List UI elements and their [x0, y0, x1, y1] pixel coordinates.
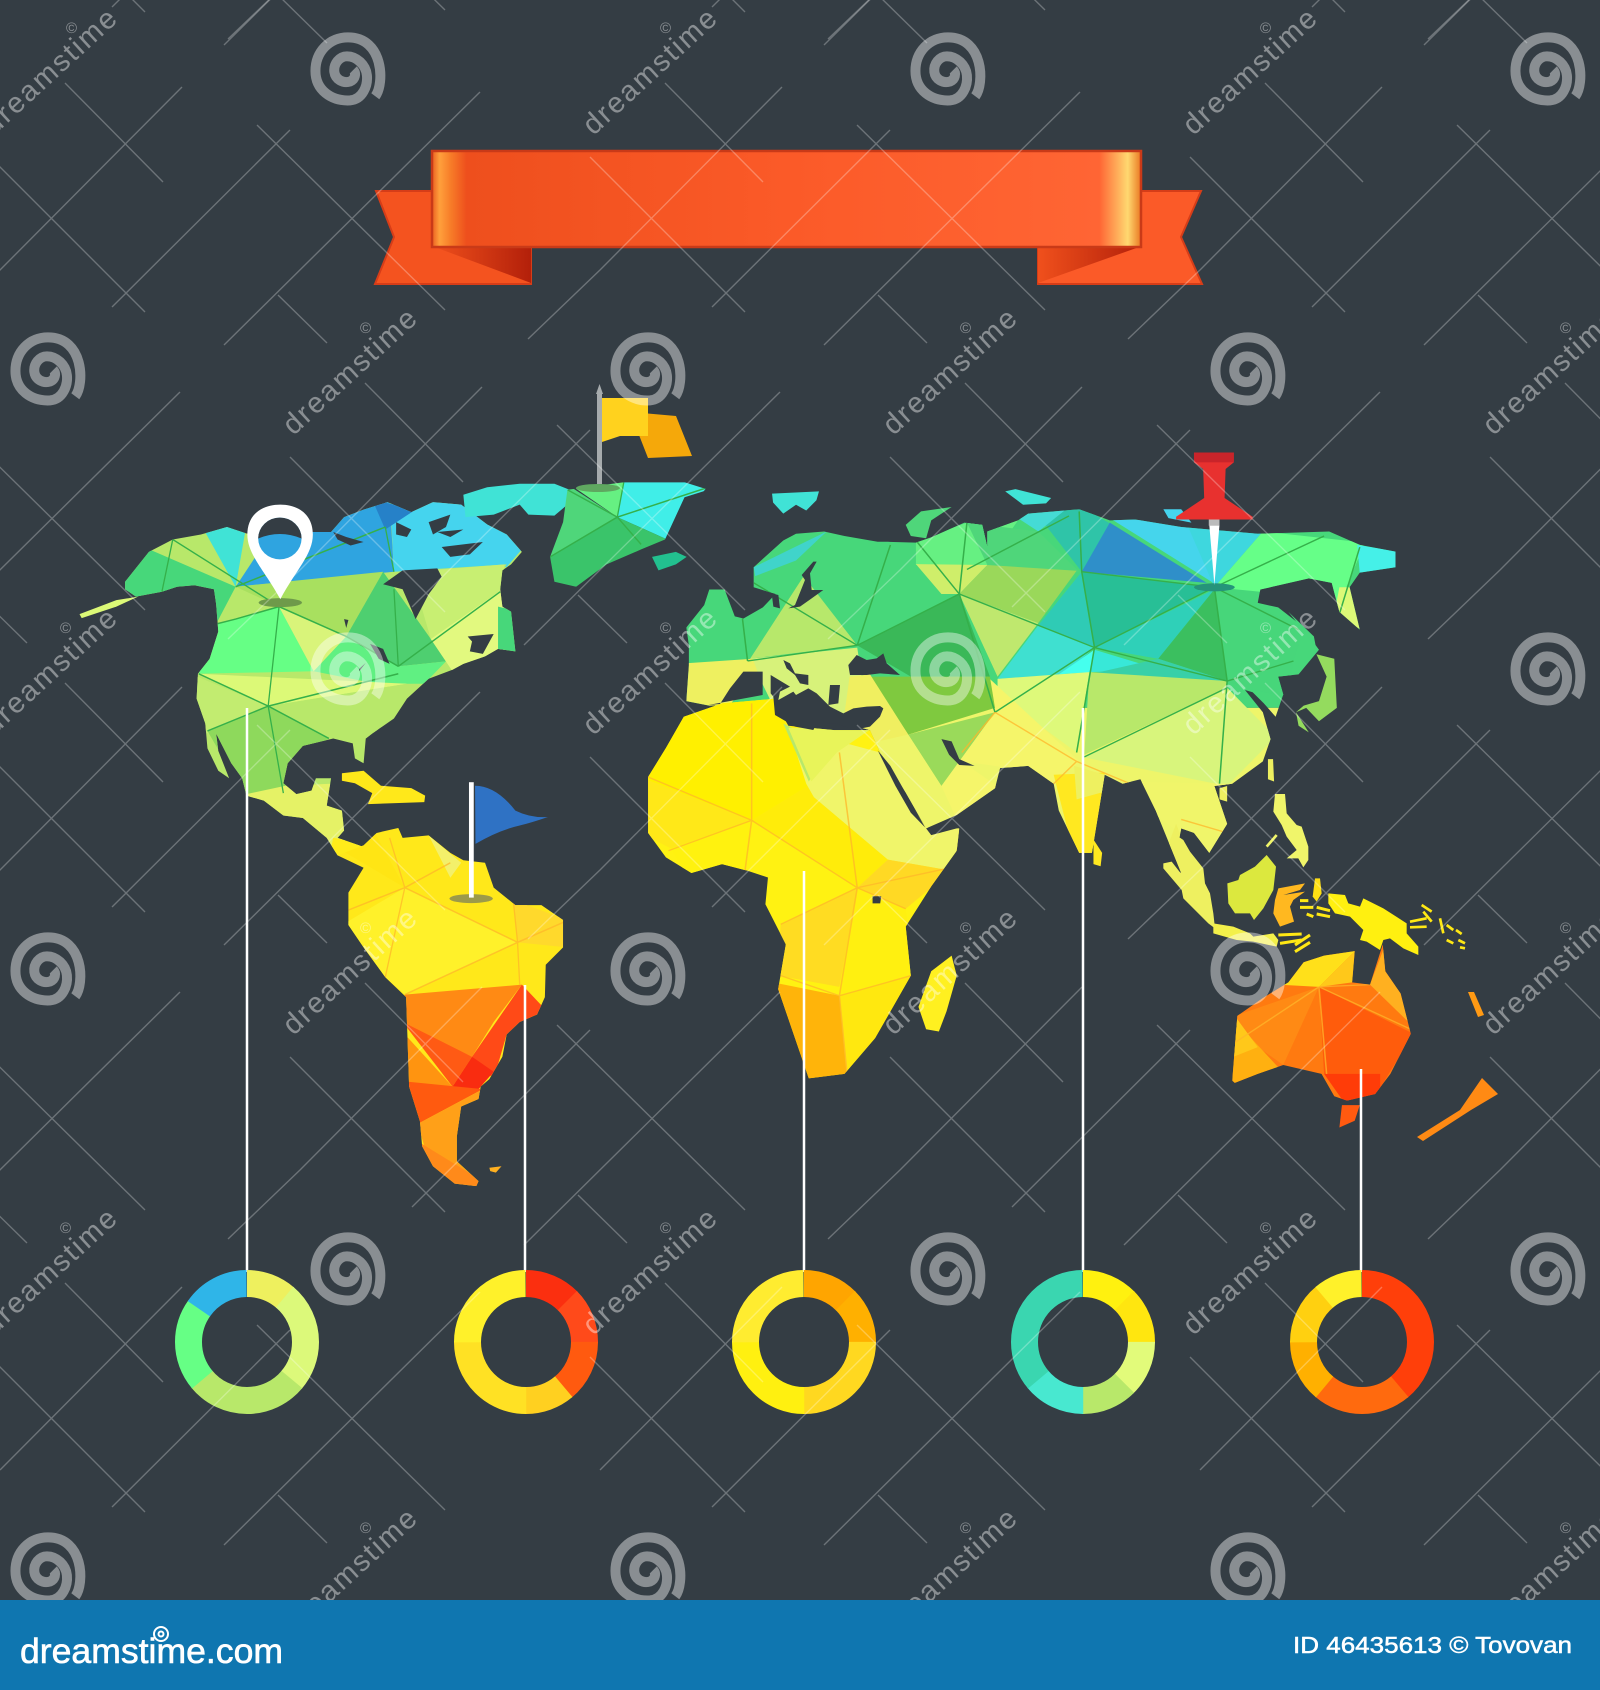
north america	[125, 502, 522, 856]
gulf of aden	[926, 822, 959, 835]
watermark text: ©	[360, 320, 371, 337]
south america	[338, 828, 564, 1186]
iceland	[652, 552, 687, 570]
greenland	[546, 480, 711, 589]
watermark text: dreamstime	[577, 603, 723, 741]
ribbon left tail	[375, 191, 531, 284]
watermark text: dreamstime	[577, 3, 723, 141]
watermark text: ©	[60, 620, 71, 637]
leader line 2	[524, 985, 526, 1272]
mediterranean, black sea and baltic coastlines	[708, 562, 900, 730]
world map: Eurasia, Africa, Australia	[640, 489, 1421, 1127]
leader line 1	[246, 708, 248, 1272]
watermark text: dreamstime	[277, 303, 423, 441]
watermark text: dreamstime	[877, 903, 1023, 1041]
footer logo text: dreamstime.com	[20, 1632, 283, 1671]
watermark text: dreamstime	[277, 903, 423, 1041]
malay peninsula and sumatra	[1163, 837, 1215, 928]
southeast asia islands	[1163, 794, 1465, 955]
watermark text: ©	[1260, 20, 1271, 37]
watermark text: ©	[660, 20, 671, 37]
ribbon right fold	[1038, 246, 1142, 283]
tasmania	[1339, 1105, 1360, 1127]
aleutian islands	[80, 597, 138, 618]
watermark text: dreamstime	[1177, 1203, 1323, 1341]
footer logo spiral	[154, 1627, 168, 1641]
watermark text: dreamstime	[1177, 603, 1323, 741]
aegean sea	[828, 685, 840, 705]
black sea	[848, 653, 900, 675]
new caledonia	[1468, 992, 1484, 1017]
kattegat	[772, 593, 780, 608]
sakhalin	[1288, 612, 1316, 650]
watermark text: ©	[960, 920, 971, 937]
watermark text: ©	[660, 1220, 671, 1237]
donut chart 1	[188, 1284, 306, 1400]
borneo	[1227, 855, 1276, 920]
ribbon left fold	[432, 246, 531, 283]
watermark text: ©	[960, 320, 971, 337]
western mediterranean	[708, 672, 763, 705]
leader line 5	[1360, 1069, 1362, 1272]
footer bar	[0, 1600, 1600, 1690]
ribbon banner	[375, 151, 1202, 284]
novaya zemlya	[906, 507, 952, 538]
watermark text: ©	[1260, 620, 1271, 637]
baltic sea	[788, 562, 823, 608]
new guinea	[1328, 893, 1418, 955]
central and eastern mediterranean	[771, 675, 883, 730]
java	[1213, 923, 1278, 947]
icon: blue flag	[449, 782, 548, 903]
watermark text: dreamstime	[877, 303, 1023, 441]
new siberian islands	[1163, 509, 1191, 523]
donut chart 5	[1304, 1284, 1420, 1400]
ribbon main band	[432, 151, 1141, 247]
watermark text: dreamstime	[877, 1503, 1023, 1641]
franz josef land	[1005, 489, 1051, 505]
watermark text: ©	[960, 1520, 971, 1537]
leader line 4	[1082, 708, 1084, 1272]
palawan	[1267, 835, 1277, 847]
ribbon right tail	[1038, 191, 1202, 284]
taiwan and hainan	[1219, 759, 1274, 802]
africa	[640, 694, 967, 1083]
red sea	[878, 750, 925, 827]
donut chart 2	[468, 1284, 584, 1400]
watermark text: ©	[1560, 320, 1571, 337]
new zealand	[1417, 1078, 1498, 1141]
eurasia	[686, 509, 1396, 880]
watermark text: ©	[1260, 1220, 1271, 1237]
falkland islands	[489, 1166, 502, 1173]
watermark text: dreamstime	[577, 1203, 723, 1341]
icon: yellow flag	[576, 384, 692, 492]
japan	[1296, 654, 1337, 732]
ellesmere island	[463, 484, 570, 517]
new zealand and new caledonia	[1417, 992, 1498, 1141]
australia	[1232, 944, 1411, 1101]
watermark text: ©	[660, 620, 671, 637]
arctic channels and great lakes	[333, 515, 494, 671]
watermark text: ©	[360, 920, 371, 937]
persian gulf	[941, 739, 975, 766]
madagascar	[918, 956, 957, 1031]
watermark text: ©	[1560, 1520, 1571, 1537]
footer credit: ID 46435613 © Tovovan	[1293, 1632, 1572, 1658]
watermark text: ©	[60, 1220, 71, 1237]
halmahera	[1313, 878, 1322, 902]
leader line 3	[803, 871, 805, 1272]
donut chart 3	[746, 1284, 862, 1400]
icon: red push pin	[1176, 452, 1253, 591]
hudson bay	[383, 568, 442, 619]
watermark text: ©	[1560, 920, 1571, 937]
lake	[873, 896, 881, 903]
solomon and vanuatu islands	[1410, 905, 1465, 948]
watermark text: dreamstime	[277, 1503, 423, 1641]
sulawesi	[1273, 883, 1305, 927]
donut chart 4	[1024, 1284, 1142, 1400]
watermark text: dreamstime	[1177, 3, 1323, 141]
lesser sunda and maluku islands	[1278, 901, 1330, 952]
sri lanka	[1093, 840, 1102, 866]
caribbean islands	[342, 771, 425, 804]
watermark text: ©	[66, 20, 77, 37]
world map: the Americas	[60, 440, 711, 1196]
svalbard	[772, 491, 819, 514]
adriatic sea	[783, 660, 808, 685]
watermark text: ©	[360, 1520, 371, 1537]
icon: white map marker	[247, 505, 313, 607]
philippines	[1273, 794, 1308, 867]
